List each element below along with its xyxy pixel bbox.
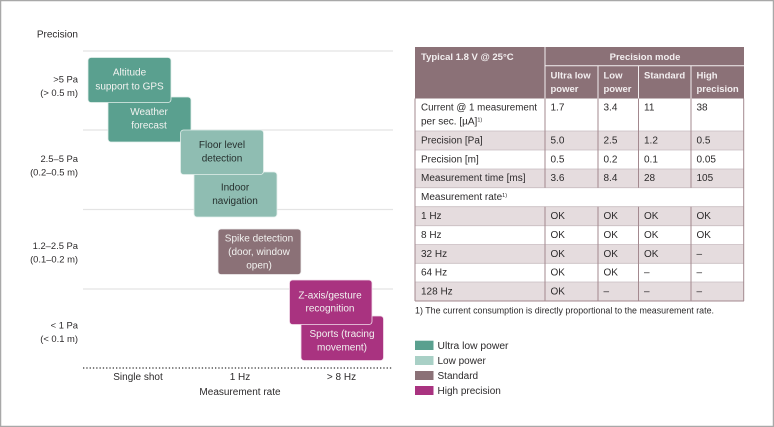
table header: Ultra low [550, 70, 591, 81]
box: z-axis gesture recognition: Z-axis/gesture [298, 290, 362, 301]
box: z-axis gesture recognition: recognition [306, 304, 354, 315]
row: 32 Hz: 32 Hz [421, 249, 447, 260]
box: floor level detection [180, 130, 264, 174]
row: current: Current @ 1 measurement [421, 102, 537, 113]
row: measurement time: 8.4 [604, 173, 618, 184]
table header: Typical 1.8 V @ 25°C [421, 52, 514, 63]
chart: precision vs measurement rate [30, 30, 393, 398]
row: 128 Hz: OK [550, 287, 565, 298]
y axis labels: (< 0.1 m) [40, 333, 78, 344]
legend item: ultra low power: Ultra low power [438, 341, 509, 352]
row: precision Pa: Precision [Pa] [421, 136, 483, 146]
row: 128 Hz: – [644, 287, 650, 298]
x axis labels: > 8 Hz [327, 372, 356, 383]
row: precision m [421, 154, 716, 166]
row: current: per sec. [µA] [421, 116, 477, 127]
row: 64 Hz: 64 Hz [421, 268, 447, 279]
table header: power [604, 84, 632, 95]
row: measurement rate heading: Measurement rate [421, 192, 502, 203]
y axis labels: < 1 Pa [51, 320, 79, 331]
row: precision m: 0.05 [696, 154, 716, 166]
row: 8 Hz: OK [604, 230, 618, 241]
box: z-axis gesture recognition [290, 280, 372, 324]
row: measurement rate heading: 1) [502, 193, 507, 199]
box: indoor navigation [194, 172, 277, 217]
y axis labels: 2.5–5 Pa [40, 153, 79, 164]
footnote: 1) The current consumption is directly proportional to the measurement rate. [415, 305, 714, 315]
box: weather forecast [108, 97, 191, 142]
row: current: 3.4 [604, 102, 618, 113]
row: precision Pa [421, 136, 711, 146]
row: current: 1) [477, 117, 482, 123]
row: measurement time: 3.6 [550, 173, 565, 184]
row: 8 Hz [421, 230, 711, 241]
legend item: high precision: High precision [438, 386, 501, 397]
table header [415, 47, 744, 98]
table header: power [550, 84, 579, 95]
row: precision Pa: 5.0 [550, 136, 565, 146]
table header: Precision mode [610, 52, 680, 63]
box: weather forecast: Weather [130, 107, 168, 118]
y axis labels: (> 0.5 m) [40, 87, 78, 98]
row: measurement time: 105 [696, 173, 714, 184]
x axis labels: 1 Hz [230, 372, 250, 383]
row: 8 Hz: OK [644, 230, 659, 241]
row: 1 Hz: 1 Hz [421, 211, 442, 222]
row: current: 38 [696, 102, 708, 113]
row: 128 Hz [421, 287, 702, 298]
row: 8 Hz: OK [550, 230, 565, 241]
row: 8 Hz: OK [696, 230, 711, 241]
legend item: low power: Low power [438, 356, 487, 367]
row: 1 Hz: OK [696, 211, 711, 222]
table header: precision [696, 84, 739, 95]
y axis labels: 1.2–2.5 Pa [33, 240, 79, 251]
row: 128 Hz: – [604, 287, 610, 298]
row: 32 Hz: OK [604, 249, 618, 260]
row: 1 Hz [421, 211, 711, 222]
y axis labels [30, 74, 79, 344]
row: precision Pa: 0.5 [696, 136, 711, 146]
row: current: 1.7 [550, 102, 565, 113]
row: 64 Hz [421, 268, 702, 279]
row: 32 Hz: – [696, 249, 702, 260]
x axis labels: Single shot [113, 372, 163, 383]
row: 1 Hz: OK [550, 211, 565, 222]
row: 32 Hz [421, 249, 702, 260]
box: indoor navigation: navigation [212, 196, 258, 207]
box: sports: Sports (tracing [309, 329, 375, 340]
row: 8 Hz: 8 Hz [421, 230, 442, 241]
x axis labels [113, 372, 356, 383]
box: spike detection: open) [246, 260, 272, 271]
row: 64 Hz: – [696, 268, 702, 279]
box: weather forecast: forecast [131, 121, 167, 132]
row: measurement time: Measurement time [ms] [421, 173, 526, 184]
row: 32 Hz: OK [644, 249, 659, 260]
row: 128 Hz: – [696, 287, 702, 298]
x axis title: Measurement rate [199, 387, 281, 398]
row: 64 Hz: OK [550, 268, 565, 279]
box: spike detection [218, 229, 301, 274]
row: 128 Hz: 128 Hz [421, 287, 453, 298]
table: precision mode specifications [415, 47, 744, 301]
box: sports [301, 316, 384, 360]
row: precision Pa: 2.5 [604, 136, 618, 146]
box: floor level detection: Floor level [199, 140, 245, 151]
legend [415, 341, 509, 397]
row: 64 Hz: – [644, 268, 650, 279]
row: precision m: 0.5 [550, 154, 565, 166]
row: precision m: 0.2 [604, 154, 618, 166]
row: current: 11 [644, 102, 655, 113]
table header: High [696, 70, 718, 81]
table header: Standard [644, 70, 685, 81]
y axis labels: >5 Pa [53, 74, 79, 84]
legend item: standard: Standard [438, 371, 478, 382]
row: precision m: Precision [m] [421, 154, 479, 166]
row: precision Pa: 1.2 [644, 136, 658, 146]
y axis title: Precision [37, 30, 78, 41]
box: altitude support to GPS: Altitude [113, 68, 147, 79]
box: altitude support to GPS: support to GPS [95, 81, 164, 92]
box: spike detection: Spike detection [225, 234, 293, 245]
row: measurement time: 28 [644, 173, 656, 184]
row: precision m: 0.1 [644, 154, 658, 166]
box: altitude support to GPS [88, 58, 171, 102]
box: indoor navigation: Indoor [221, 183, 250, 194]
row: measurement time [421, 173, 714, 184]
y axis labels: (0.2–0.5 m) [30, 167, 78, 178]
table header: Low [604, 70, 623, 81]
row: 1 Hz: OK [604, 211, 618, 222]
box: spike detection: (door, window [228, 247, 291, 258]
row: 1 Hz: OK [644, 211, 659, 222]
y axis labels: (0.1–0.2 m) [30, 253, 78, 264]
row: 32 Hz: OK [550, 249, 565, 260]
row: current [421, 102, 708, 127]
box: floor level detection: detection [202, 153, 242, 164]
row: 64 Hz: OK [604, 268, 618, 279]
box: sports: movement) [317, 342, 367, 353]
